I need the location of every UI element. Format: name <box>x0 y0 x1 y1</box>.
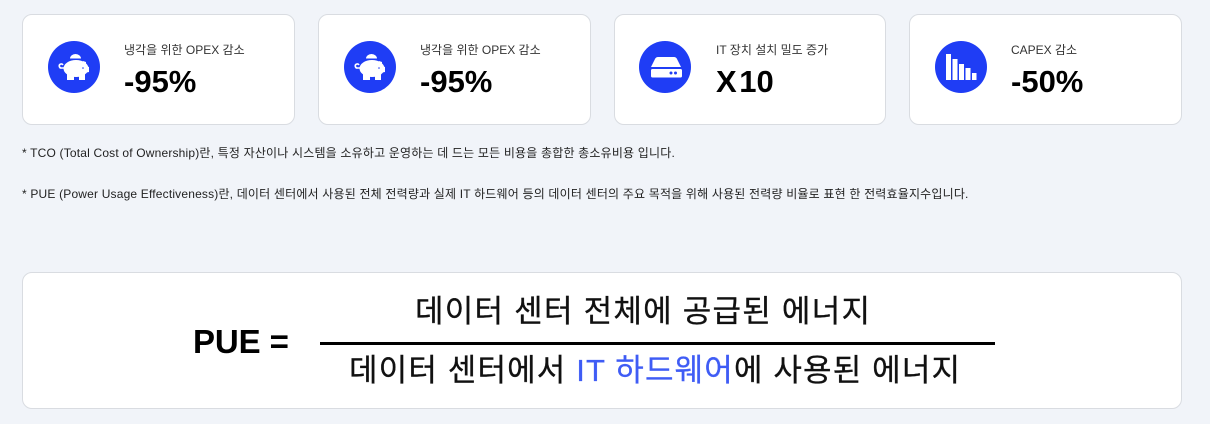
panel: KPI card cooling OPEX 2 <box>318 14 591 125</box>
label: CAPEX 감소 <box>1011 43 1077 57</box>
footnote: PUE: * PUE (Power Usage Effectiveness)란, 데이터 센터에서 사용된 전체 전력량과 실제 IT 하드웨어 등의 데이터 센터의 주요 목적을 위해 사용된 전력량 비율로 표현 한 전력효율지수입니다. <box>22 187 969 201</box>
icon: piggy bank <box>344 41 396 93</box>
label: 냉각을 위한 OPEX 감소 <box>420 43 541 57</box>
fraction bar <box>320 342 995 345</box>
icon: piggy bank <box>48 41 100 93</box>
icon: server drive <box>639 41 691 93</box>
footnote: TCO: * TCO (Total Cost of Ownership)란, 특정 자산이나 시스템을 소유하고 운영하는 데 드는 모든 비용을 총합한 총소유비용 입니다. <box>22 146 675 160</box>
value: -95% <box>420 64 492 99</box>
label: IT 장치 설치 밀도 증가 <box>716 43 828 57</box>
denominator: 데이터 센터에서 IT 하드웨어에 사용된 에너지 <box>349 353 961 388</box>
formula label: PUE = <box>193 323 289 360</box>
panel: KPI card cooling OPEX 1 <box>22 14 295 125</box>
value: -50% <box>1011 64 1083 99</box>
panel: PUE formula <box>22 272 1182 409</box>
panel: KPI card CAPEX <box>909 14 1182 125</box>
value: X 10 <box>716 64 774 99</box>
panel: KPI card IT density <box>614 14 886 125</box>
value: -95% <box>124 64 196 99</box>
label: 냉각을 위한 OPEX 감소 <box>124 43 245 57</box>
icon: descending bars <box>935 41 987 93</box>
numerator: 데이터 센터 전체에 공급된 에너지 <box>415 294 871 329</box>
